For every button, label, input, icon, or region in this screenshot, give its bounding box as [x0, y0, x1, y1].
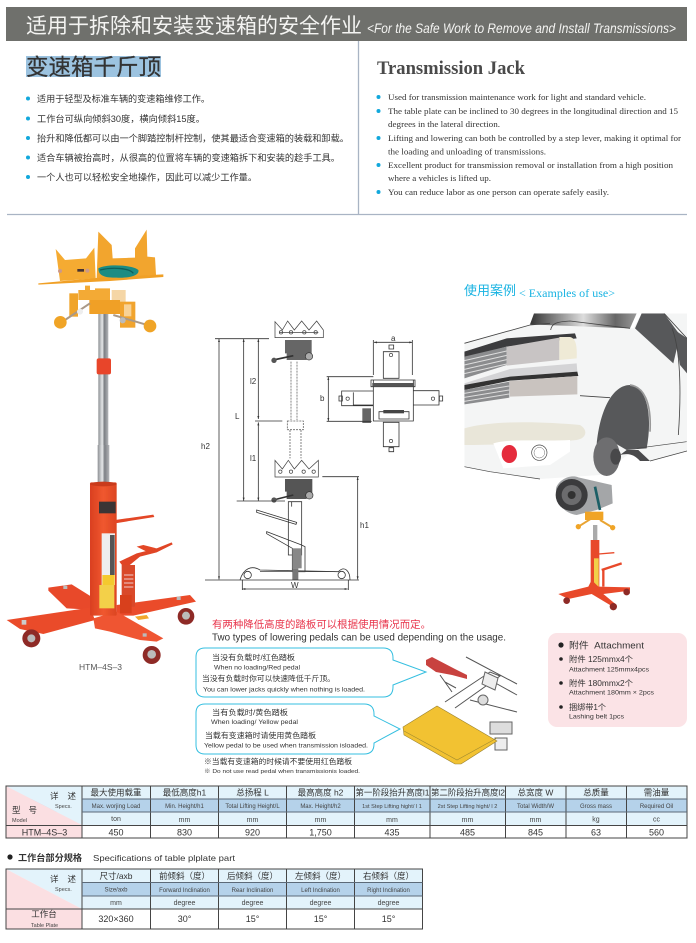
panel: english intro — [376, 59, 681, 197]
table units row: mm — [386, 817, 398, 824]
dimension labels: a — [391, 334, 396, 343]
table plate section heading: Specifications of table plplate part — [93, 853, 236, 863]
table units row: mm — [530, 817, 541, 824]
chinese feature list: 一个人也可以轻松安全地操作，因此可以减少工作量。 — [37, 172, 257, 182]
red pedal — [426, 657, 467, 679]
heading: examples of use: < Examples of use> — [519, 288, 615, 300]
table data row — [98, 914, 396, 924]
attachment item 1: 附件 125mmx4个 — [569, 654, 633, 664]
pedal warning note — [204, 757, 360, 775]
dimension labels: W — [291, 581, 299, 590]
table header row chinese — [99, 871, 414, 881]
dashed column — [290, 362, 301, 458]
table header row english: 2st Step Lifting hight/ l 2 — [438, 804, 497, 810]
heading: examples of use: 使用案例 — [464, 283, 516, 298]
table header row english — [104, 888, 410, 894]
dimension lines — [205, 339, 412, 590]
table header row chinese: 需油量 — [644, 788, 670, 798]
english feature list: The table plate can be inclined to 30 degrees in the longitudinal direction and 15 — [388, 106, 678, 116]
heading: chinese product name: 变速箱千斤顶 — [26, 55, 161, 80]
table: main specifications — [6, 786, 687, 838]
english feature list: Lifting and lowering can both be controlled by a step lever, making it optimal for — [388, 133, 681, 143]
callout: red pedal: 当没有负载时/红色踏板 — [212, 652, 296, 662]
pedal section heading: 有两种降低高度的踏板可以根据使用情况而定。 — [212, 618, 431, 631]
table header row english: Max. worjing Load — [92, 804, 140, 810]
callout: yellow pedal — [196, 704, 400, 754]
table corner header — [6, 786, 82, 838]
callout: red pedal: You can lower jacks quickly when nothing is loaded. — [203, 688, 365, 694]
table header row chinese: 最低高度h1 — [163, 788, 206, 798]
table header row chinese: 左倾斜（度） — [295, 871, 346, 881]
table header row english: Right Inclination — [367, 888, 410, 894]
english feature list — [376, 92, 681, 197]
table units row — [111, 816, 660, 824]
table units row: ton — [111, 816, 121, 823]
table header row english: Rear Inclination — [232, 888, 273, 894]
dimension labels — [201, 334, 396, 590]
table header row chinese: 第二阶段抬升高度l2 — [431, 788, 505, 798]
callout: red pedal: 当没有负载时你可以快速降低千斤顶。 — [202, 673, 335, 683]
table units row: degree — [242, 900, 264, 907]
table plate section heading: 工作台部分规格 — [18, 852, 82, 863]
callout: yellow pedal: Yellow pedal to be used when transmission isloaded. — [204, 744, 368, 750]
table header row chinese: 后倾斜（度） — [227, 871, 278, 881]
heading: examples of use — [464, 283, 615, 300]
dimension labels: h2 — [201, 442, 210, 451]
panel: chinese intro — [26, 55, 349, 182]
table corner header: Specs. — [55, 804, 72, 810]
table data row: 15° — [246, 914, 260, 924]
chinese feature list: 适合车辆被抬高时，从很高的位置将车辆的变速箱拆下和安装的趁手工具。 — [37, 152, 340, 163]
english feature list: the loading and unloading of transmissions. — [388, 146, 546, 156]
model label: HTM–4S–3 — [79, 663, 123, 672]
table header row english: Max. Height/h2 — [300, 804, 341, 810]
dimension labels: L — [235, 412, 240, 421]
table units row: kg — [592, 816, 600, 824]
dimension labels: b — [320, 394, 325, 403]
table data row: 30° — [178, 914, 192, 924]
pedal section heading — [212, 618, 506, 644]
english feature list: degrees in the lateral direction. — [388, 119, 500, 129]
table header row chinese: 最高高度 h2 — [298, 788, 344, 798]
attachment item 2: 附件 180mmx2个 — [569, 678, 633, 688]
attachment item 2: Attachment 180mm × 2pcs — [569, 690, 654, 696]
heading: english product name: Transmission Jack — [377, 59, 526, 79]
table data row: 845 — [528, 828, 543, 838]
table data row: 320×360 — [98, 914, 134, 924]
table units row — [110, 900, 400, 907]
callout: yellow pedal: 当有负载时/黄色踏板 — [212, 707, 289, 717]
table data row: 920 — [245, 828, 260, 838]
raised table — [275, 321, 323, 338]
table units row: mm — [462, 817, 473, 824]
table: table plate specifications — [6, 869, 423, 929]
english feature list: You can reduce labor as one person can operate safely easily. — [388, 187, 609, 197]
table units row: cc — [653, 816, 660, 824]
table header row chinese: 前倾斜（度） — [159, 871, 210, 881]
english feature list: Excellent product for transmission removal or installation from a high position — [388, 160, 674, 170]
table header row english: Left Inclination — [301, 888, 340, 894]
dimension labels: h1 — [360, 521, 369, 530]
table header row english: Gross mass — [580, 804, 612, 810]
table corner header: 型 号 — [12, 805, 37, 815]
attachment heading: 附件 Attachment — [569, 640, 644, 650]
dimension labels: l1 — [250, 454, 257, 463]
table header row chinese — [90, 788, 670, 798]
jack body and pedals — [257, 502, 305, 572]
table data row: 435 — [384, 828, 400, 838]
english feature list: where a vehicles is lifted up. — [388, 173, 491, 183]
english feature list: Used for transmission maintenance work for light and standard vehicle. — [388, 92, 646, 102]
table header row chinese: 最大使用载重 — [90, 788, 142, 798]
table data row: 1,750 — [309, 828, 332, 838]
intro panel frame — [7, 41, 687, 214]
top view — [339, 345, 443, 452]
table header row english: Required Oil — [640, 804, 673, 810]
table data row: 15° — [314, 914, 328, 924]
table units row: mm — [179, 817, 190, 824]
pedal section heading: Two types of lowering pedals can be used depending on the usage. — [212, 632, 506, 644]
panel: attachments — [548, 633, 687, 727]
chinese feature list: 适用于轻型及标准车辆的变速箱维修工作。 — [37, 93, 210, 104]
chinese feature list: 工作台可纵向倾斜30度，横向倾斜15度。 — [37, 113, 205, 124]
dimension labels: l2 — [250, 377, 257, 386]
table header row chinese: 右倾斜（度） — [363, 871, 414, 881]
dimension diagram — [205, 321, 443, 590]
table data row: 830 — [177, 828, 192, 838]
table data row: HTM–4S–3 — [22, 828, 67, 838]
table data row: 485 — [460, 828, 475, 838]
table header row english — [92, 804, 673, 810]
header banner — [6, 7, 687, 41]
table plate section heading — [7, 852, 236, 863]
yellow pedal — [403, 706, 497, 764]
table corner header: 详 述 — [50, 791, 76, 801]
table header row english: 1st Step Lifting hight/ l 1 — [362, 804, 422, 810]
table header row chinese: 尺寸/axb — [99, 871, 133, 881]
illustration: pedals — [403, 657, 517, 764]
table header row chinese: 第一阶段抬升高度l1 — [356, 788, 430, 798]
table units row: mm — [315, 817, 326, 824]
table header row chinese: 总质量 — [583, 788, 609, 798]
table units row: mm — [110, 900, 122, 907]
table header row english: Total Lifting Height/L — [225, 804, 280, 810]
pedal warning note: ※ Do not use read pedal when transmissionis loaded. — [204, 768, 360, 775]
table corner header: 详 述 — [50, 874, 76, 884]
table corner header — [6, 869, 82, 929]
attachment item 3 — [559, 702, 624, 720]
banner title chinese: 适用于拆除和安装变速箱的安全作业 — [26, 15, 362, 38]
table units row: degree — [310, 900, 332, 907]
illustration: truck — [464, 313, 687, 479]
table header row english: Total Width/W — [517, 804, 554, 810]
callout: yellow pedal: When loading/ Yellow pedal — [211, 720, 298, 726]
table corner header: 工作台 — [31, 909, 57, 919]
table units row: degree — [378, 900, 400, 907]
table header row english: Forward Inclination — [159, 888, 210, 894]
attachment item 1 — [559, 654, 649, 674]
callout: yellow pedal: 当载有变速箱时请使用黄色踏板 — [205, 730, 316, 740]
table data row — [22, 828, 664, 838]
table header row chinese: 总扬程 L — [236, 788, 269, 798]
attachment item 2 — [559, 678, 654, 696]
table data row: 63 — [591, 828, 601, 838]
table corner header: Model — [12, 818, 27, 824]
table header row english: Size/axb — [104, 888, 128, 894]
attachment item 3: 捆绑带1个 — [569, 702, 606, 712]
table units row: degree — [174, 900, 196, 907]
table units row: mm — [247, 817, 258, 824]
callout: red pedal — [196, 648, 426, 697]
attachment item 1: Attachment 125mmx4pcs — [569, 668, 649, 674]
photo: jack holding transmission — [556, 476, 630, 610]
chinese feature list: 抬升和降低都可以由一个脚踏控制杆控制，使其最适合变速箱的装载和卸载。 — [37, 132, 349, 144]
photo: transmission jack — [7, 230, 196, 672]
table header row english: Min. Height/h1 — [165, 804, 205, 810]
table data row: 15° — [382, 914, 396, 924]
table corner header: Specs. — [55, 887, 72, 893]
pedal warning note: ※当载有变速箱的时候请不要使用红色踏板 — [204, 757, 353, 766]
table header row chinese: 总宽度 W — [518, 788, 553, 798]
table data row: 560 — [649, 828, 664, 838]
lowered table — [275, 460, 318, 477]
callout: red pedal: When no loading/Red pedal — [214, 666, 300, 672]
chinese feature list — [26, 93, 349, 182]
table data row: 450 — [108, 828, 124, 838]
table corner header: Table Plate — [31, 923, 58, 929]
attachment item 3: Lashing belt 1pcs — [569, 714, 624, 720]
